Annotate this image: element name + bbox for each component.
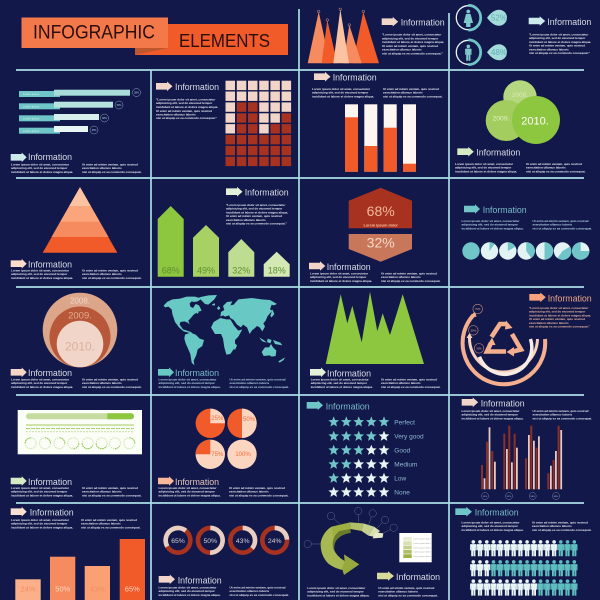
text block: incididunt ut labore et dolore magna aliqua. bbox=[307, 593, 370, 597]
arrow heading: Information bbox=[327, 368, 371, 378]
text block: Lorem ipsum dolor sit amet, consectetur bbox=[158, 586, 217, 590]
nested circles bbox=[43, 293, 117, 368]
text block: nisi ut aliquip ex ea commodo consequat. bbox=[532, 416, 592, 420]
text block: exercitation ullamco laboris bbox=[82, 166, 122, 170]
star rows: None bbox=[394, 490, 410, 497]
overlapping circles: 2009. bbox=[492, 116, 510, 122]
text block: adipisicing elit, sed do eiusmod tempor bbox=[11, 490, 68, 494]
text block: Ut enim ad minim veniam, quis nostrud bbox=[382, 44, 438, 48]
text block: Ut enim ad minim veniam, quis nostrud bbox=[82, 162, 138, 166]
panel: progress elements bbox=[11, 410, 142, 497]
title banner: ELEMENTS bbox=[179, 31, 270, 51]
text block: exercitation ullamco laboris bbox=[532, 223, 573, 227]
text block: Ut enim ad minim veniam, quis nostrud bbox=[383, 87, 439, 91]
text block: "Lorem ipsum dolor sit amet, consectetur bbox=[226, 203, 286, 207]
title banner bbox=[22, 18, 288, 55]
donut charts: 50% bbox=[203, 538, 217, 545]
house bar chart bbox=[158, 206, 290, 277]
nested circles: 2008. bbox=[70, 296, 90, 306]
arrow heading: Information bbox=[481, 398, 525, 408]
text block: nisi ut aliquip ex ea commodo consequat. bbox=[82, 276, 142, 280]
legend card: Lorem ipsum dolor bbox=[413, 542, 431, 545]
text block: Ut enim ad minim veniam, quis nostrud bbox=[81, 518, 137, 522]
arrow heading: Information bbox=[547, 17, 591, 27]
overlapping circles: 2008. bbox=[512, 92, 528, 99]
arrow heading: Information bbox=[396, 572, 440, 582]
panel: hexagon split bbox=[309, 188, 441, 283]
value markers: 50% bbox=[471, 328, 477, 332]
text block: "Lorem ipsum dolor sit amet, consectetur bbox=[156, 98, 216, 102]
star rows: Medium bbox=[394, 462, 417, 469]
text block: nisi ut aliquip ex ea commodo consequat." bbox=[226, 222, 288, 226]
text block: Lorem ipsum dolor sit amet, consectetur bbox=[310, 271, 369, 275]
column chart: 43% bbox=[90, 585, 105, 594]
text block: nisi ut aliquip ex ea commodo consequat." bbox=[382, 51, 444, 55]
hexagon chart: Lorem ipsum dolor bbox=[364, 223, 398, 227]
text block: adipisicing elit, sed do eiusmod tempor bbox=[11, 272, 68, 276]
text block: nisi ut aliquip ex ea commodo consequat. bbox=[230, 593, 289, 597]
text block: incididunt ut labore et dolore magna aliqua. bbox=[462, 226, 524, 230]
text block: Lorem ipsum dolor sit amet, consectetur bbox=[11, 162, 70, 166]
star rows: Good bbox=[394, 448, 411, 455]
star rows bbox=[328, 416, 424, 497]
star rows: Low bbox=[394, 476, 407, 483]
text block: incididunt ut labore et dolore magna aliqua. bbox=[529, 40, 591, 44]
star rows: Very good bbox=[394, 434, 424, 440]
triangle chart bbox=[308, 8, 379, 63]
panel: pyramid bbox=[11, 187, 142, 280]
arrow heading: Information bbox=[327, 262, 371, 272]
bar rows: 68% bbox=[102, 118, 107, 120]
text block: Ut enim ad minim veniam, quis nostrud bbox=[532, 409, 589, 413]
text block: adipisicing elit, sed do eiusmod tempor bbox=[158, 490, 216, 494]
text block: adipisicing elit, sed do eiusmod tempor bbox=[156, 101, 213, 105]
text block: exercitation ullamco laboris bbox=[529, 47, 569, 51]
text block: adipisicing elit, sed do eiusmod tempor bbox=[11, 522, 68, 526]
text block: nisi ut aliquip ex ea commodo consequat. bbox=[82, 493, 142, 497]
text block: adipisicing elit, sed do eiusmod tempor bbox=[226, 207, 283, 211]
text block: Ut enim ad minim veniam, quis nostrud bbox=[229, 486, 285, 490]
arrow heading: Information bbox=[483, 205, 527, 215]
text block: incididunt ut labore et dolore magna aliqua. bbox=[529, 314, 591, 318]
text block: adipisicing elit, sed do eiusmod tempor bbox=[158, 589, 216, 593]
text block: incididunt ut labore et dolore magna aliqua. bbox=[226, 210, 288, 214]
arrow heading: Information bbox=[30, 508, 74, 518]
recycle icon bbox=[487, 320, 521, 356]
text block: incididunt ut labore et dolore magna aliqua. bbox=[455, 169, 517, 173]
text block: incididunt ut labore et dolore magna aliqua. bbox=[312, 94, 374, 98]
text block: nisi ut aliquip ex ea commodo consequat. bbox=[378, 593, 438, 597]
drop 48%: 48% bbox=[491, 48, 507, 57]
text block: nisi ut aliquip ex ea commodo consequat. bbox=[81, 526, 141, 530]
text block: nisi ut aliquip ex ea commodo consequat. bbox=[383, 94, 443, 98]
white card bbox=[18, 410, 142, 454]
text block: exercitation ullamco laboris bbox=[156, 112, 196, 116]
area chart bbox=[326, 292, 424, 364]
value markers: 70% bbox=[475, 307, 481, 311]
text block: nisi ut aliquip ex ea commodo consequat. bbox=[381, 279, 441, 283]
panel: recycle arcs bbox=[463, 292, 592, 384]
text block: nisi ut aliquip ex ea commodo consequat. bbox=[230, 385, 289, 389]
column chart bbox=[15, 539, 145, 600]
text block: exercitation ullamco laboris bbox=[82, 381, 122, 385]
text block: Ut enim ad minim veniam, quis nostrud bbox=[82, 268, 138, 272]
text block: Ut enim ad minim veniam, quis nostrud bbox=[529, 317, 585, 321]
map bbox=[164, 295, 285, 365]
text block: Lorem ipsum dolor sit amet, consectetur bbox=[158, 378, 217, 382]
ring male 48% bbox=[456, 40, 481, 65]
bar rows: 52% bbox=[117, 105, 121, 107]
bar rows: 33% bbox=[92, 130, 96, 132]
panel: donuts bbox=[158, 523, 289, 597]
text block: Ut enim ad minim veniam, quis nostrud bbox=[378, 586, 434, 590]
text block: adipisicing elit, sed do eiusmod tempor bbox=[307, 590, 364, 594]
text block: Ut enim ad minim veniam, quis nostrud bbox=[381, 271, 437, 275]
text block: nisi ut aliquip ex ea commodo consequat." bbox=[529, 51, 591, 55]
text block: nisi ut aliquip ex ea commodo consequat. bbox=[381, 385, 441, 389]
arrow heading: Information bbox=[178, 575, 222, 585]
bar chart bbox=[481, 426, 562, 500]
value markers: 30% bbox=[476, 346, 482, 350]
text block: exercitation ullamco laboris bbox=[381, 381, 421, 385]
text block: Ut enim ad minim veniam, quis nostrud bbox=[82, 486, 138, 490]
panel: stacked columns bbox=[312, 72, 443, 172]
waffle chart bbox=[226, 81, 291, 166]
hexagon chart bbox=[349, 188, 412, 262]
pie charts: 100% bbox=[235, 452, 251, 458]
text block: adipisicing elit, sed do eiusmod tempor bbox=[312, 91, 369, 95]
panel: 3D arrow bbox=[304, 507, 440, 597]
arrow heading: Information bbox=[476, 148, 520, 158]
text block: incididunt ut labore et dolore magna aliqua. bbox=[462, 416, 524, 420]
text block: nisi ut aliquip ex ea commodo consequat. bbox=[526, 169, 586, 173]
text block: Ut enim ad minim veniam, quis nostrud bbox=[532, 219, 589, 223]
text block: incididunt ut labore et dolore magna aliqua. bbox=[311, 385, 373, 389]
text block: adipisicing elit, sed do eiusmod tempor bbox=[11, 381, 68, 385]
legend card bbox=[399, 533, 432, 562]
text block: Lorem ipsum dolor sit amet, consectetur bbox=[311, 378, 370, 382]
panel: star ratings bbox=[307, 400, 424, 497]
drop 52%: 52% bbox=[491, 14, 507, 22]
text block: Ut enim ad minim veniam, quis nostrud bbox=[529, 44, 585, 48]
text block: adipisicing elit, sed do eiusmod tempor bbox=[462, 413, 519, 417]
panel: square grid bbox=[156, 81, 291, 166]
text block: adipisicing elit, sed do eiusmod tempor bbox=[455, 166, 512, 170]
overlapping circles bbox=[486, 80, 560, 144]
house bar chart: 68% bbox=[162, 266, 180, 276]
text block: Lorem ipsum dolor sit amet, consectetur bbox=[462, 409, 520, 413]
text block: exercitation ullamco laboris bbox=[230, 381, 270, 385]
text block: incididunt ut labore et dolore magna aliqua. bbox=[156, 105, 218, 109]
bar rows: Lorem ipsum bbox=[23, 129, 40, 133]
text block: adipisicing elit, sed do eiusmod tempor bbox=[311, 381, 368, 385]
arrow heading: Information bbox=[175, 82, 219, 92]
arrow heading: Information bbox=[475, 508, 519, 518]
donut charts: 65% bbox=[171, 538, 185, 545]
text block: incididunt ut labore et dolore magna aliqua. bbox=[462, 528, 524, 532]
text block: "Lorem ipsum dolor sit amet, consectetur bbox=[382, 33, 442, 37]
arrow heading: Information bbox=[28, 368, 72, 378]
nested circles: 2010. bbox=[65, 340, 95, 354]
arrow heading: Information bbox=[548, 293, 592, 303]
pie charts: 50% bbox=[243, 417, 256, 423]
text block: Ut enim ad minim veniam, quis nostrud bbox=[381, 378, 437, 382]
arrow heading: Information bbox=[175, 477, 219, 487]
text block: Lorem ipsum dolor sit amet, consectetur bbox=[312, 87, 371, 91]
panel: quarter pies bbox=[158, 409, 289, 497]
bar rows: 38% bbox=[134, 92, 139, 94]
text block: Ut enim ad minim veniam, quis nostrud bbox=[226, 214, 282, 218]
text block: Lorem ipsum dolor sit amet, consectetur bbox=[462, 219, 520, 223]
text block: exercitation ullamco laboris bbox=[382, 48, 422, 52]
panel: nested years bbox=[11, 293, 142, 389]
panel: gender percentages bbox=[456, 5, 591, 65]
text block: nisi ut aliquip ex ea commodo consequat. bbox=[229, 493, 289, 497]
text block: adipisicing elit, sed do eiusmod tempor bbox=[462, 223, 519, 227]
text block: incididunt ut labore et dolore magna aliqua. bbox=[382, 40, 444, 44]
bar rows bbox=[19, 88, 140, 134]
column chart: 24% bbox=[20, 585, 36, 594]
text block: adipisicing elit, sed do eiusmod tempor bbox=[11, 166, 68, 170]
bar rows: Lorem ipsum bbox=[23, 104, 40, 108]
text block: adipisicing elit, sed do eiusmod tempor bbox=[158, 381, 216, 385]
hexagon chart: 32% bbox=[367, 235, 395, 251]
bar rows: Lorem ipsum bbox=[23, 116, 40, 120]
text block: exercitation ullamco laboris bbox=[82, 490, 122, 494]
bar chart: 51% bbox=[507, 496, 511, 498]
column chart: 50% bbox=[55, 585, 71, 594]
text block: exercitation ullamco laboris bbox=[82, 272, 122, 276]
overlapping circles: 2010. bbox=[521, 116, 549, 128]
bar chart: 58% bbox=[531, 496, 535, 498]
text block: nisi ut aliquip ex ea commodo consequat." bbox=[529, 325, 591, 329]
title banner: INFOGRAPHIC bbox=[33, 22, 155, 44]
3D curved arrow bbox=[304, 507, 397, 575]
value markers bbox=[468, 304, 484, 353]
text block: adipisicing elit, sed do eiusmod tempor bbox=[462, 524, 519, 528]
text block: Lorem ipsum dolor sit amet, consectetur bbox=[11, 268, 70, 272]
text block: exercitation ullamco laboris bbox=[529, 321, 569, 325]
panel: pie row bbox=[462, 204, 592, 260]
text block: adipisicing elit, sed do eiusmod tempor bbox=[529, 310, 586, 314]
arrow heading: Information bbox=[175, 368, 219, 378]
legend card: Lorem ipsum dolor bbox=[413, 538, 431, 541]
text block: Ut enim ad minim veniam, quis nostrud bbox=[526, 162, 582, 166]
text block: adipisicing elit, sed do eiusmod tempor bbox=[310, 275, 367, 279]
arrow heading: Information bbox=[28, 477, 72, 487]
bar rows: Lorem ipsum bbox=[23, 92, 40, 96]
text block: exercitation ullamco laboris bbox=[226, 218, 266, 222]
arrow heading: Information bbox=[326, 402, 370, 412]
pyramid chart bbox=[43, 187, 117, 253]
text block: nisi ut aliquip ex ea commodo consequat. bbox=[532, 528, 592, 532]
donut charts bbox=[161, 523, 287, 557]
text block: Lorem ipsum dolor sit amet, consectetur bbox=[455, 162, 514, 166]
text block: "Lorem ipsum dolor sit amet, consectetur bbox=[529, 32, 589, 36]
donut charts: 24% bbox=[268, 538, 282, 545]
panel: arrow bars bbox=[158, 187, 290, 277]
text block: exercitation ullamco laboris bbox=[229, 490, 269, 494]
text block: exercitation ullamco laboris bbox=[81, 522, 121, 526]
text block: adipisicing elit, sed do eiusmod tempor bbox=[382, 36, 439, 40]
text block: incididunt ut labore et dolore magna aliqua. bbox=[11, 493, 73, 497]
nested circles: 2009. bbox=[68, 310, 92, 322]
concentric arcs bbox=[463, 311, 545, 384]
text block: incididunt ut labore et dolore magna aliqua. bbox=[158, 593, 221, 597]
text block: nisi ut aliquip ex ea commodo consequat." bbox=[156, 116, 218, 120]
arrow heading: Information bbox=[245, 188, 289, 198]
arrow heading: Information bbox=[401, 18, 445, 28]
arrow heading: Information bbox=[333, 72, 377, 82]
bar chart: 58% bbox=[554, 496, 558, 498]
text block: Lorem ipsum dolor sit amet, consectetur bbox=[307, 586, 366, 590]
column chart bbox=[345, 104, 416, 172]
text block: incididunt ut labore et dolore magna aliqua. bbox=[158, 385, 221, 389]
bar chart: 15% bbox=[483, 496, 487, 498]
text block: incididunt ut labore et dolore magna aliqua. bbox=[158, 493, 221, 497]
ring female 52% bbox=[456, 5, 481, 30]
arrow heading: Information bbox=[28, 260, 72, 270]
pie charts bbox=[196, 409, 257, 469]
panel: venn years bbox=[455, 80, 586, 173]
panel: orange columns bbox=[11, 507, 145, 600]
text block: exercitation ullamco laboris bbox=[230, 589, 270, 593]
pie charts: 25% bbox=[211, 416, 224, 422]
panel: mountain triangles bbox=[308, 8, 445, 63]
house bar chart: 32% bbox=[232, 266, 250, 276]
panel: grouped bars bbox=[462, 398, 592, 500]
text block: Ut enim ad minim veniam, quis nostrud bbox=[82, 378, 138, 382]
text block: nisi ut aliquip ex ea commodo consequat. bbox=[82, 170, 142, 174]
text block: Ut enim ad minim veniam, quis nostrud bbox=[532, 520, 588, 524]
text block: exercitation ullamco laboris bbox=[383, 91, 423, 95]
arrow heading: Information bbox=[28, 152, 72, 162]
text block: Lorem ipsum dolor sit amet, consectetur bbox=[11, 518, 70, 522]
panel: people chart bbox=[455, 507, 592, 596]
text block: incididunt ut labore et dolore magna aliqua. bbox=[11, 170, 73, 174]
pie charts: 75% bbox=[211, 452, 224, 458]
text block: exercitation ullamco laboris bbox=[532, 413, 573, 417]
pictogram rows bbox=[470, 540, 578, 596]
star rows: Perfect bbox=[394, 419, 415, 426]
text block: incididunt ut labore et dolore magna aliqua. bbox=[310, 279, 372, 283]
text block: exercitation ullamco laboris bbox=[381, 275, 421, 279]
house bar chart: 18% bbox=[268, 266, 286, 276]
text block: exercitation ullamco laboris bbox=[532, 524, 572, 528]
panel: green peaks bbox=[310, 292, 441, 389]
panel: world map bbox=[158, 295, 289, 389]
text block: incididunt ut labore et dolore magna aliqua. bbox=[11, 526, 73, 530]
text block: exercitation ullamco laboris bbox=[378, 590, 418, 594]
column chart: 65% bbox=[125, 585, 140, 594]
text block: incididunt ut labore et dolore magna aliqua. bbox=[11, 276, 73, 280]
legend card: Lorem ipsum dolor bbox=[413, 555, 431, 558]
text block: adipisicing elit, sed do eiusmod tempor bbox=[529, 36, 586, 40]
hexagon chart: 68% bbox=[367, 203, 395, 219]
text block: Ut enim ad minim veniam, quis nostrud bbox=[230, 378, 286, 382]
text block: Ut enim ad minim veniam, quis nostrud bbox=[230, 586, 286, 590]
text block: Lorem ipsum dolor sit amet, consectetur bbox=[11, 486, 70, 490]
text block: nisi ut aliquip ex ea commodo consequat. bbox=[532, 226, 592, 230]
text block: Ut enim ad minim veniam, quis nostrud bbox=[156, 109, 212, 113]
legend card: Lorem ipsum dolor bbox=[413, 546, 431, 549]
text block: nisi ut aliquip ex ea commodo consequat. bbox=[82, 385, 142, 389]
text block: "Lorem ipsum dolor sit amet, consectetur bbox=[529, 306, 589, 310]
text block: incididunt ut labore et dolore magna aliqua. bbox=[11, 385, 73, 389]
text block: Lorem ipsum dolor sit amet, consectetur bbox=[11, 378, 70, 382]
text block: Lorem ipsum dolor sit amet, consectetur bbox=[158, 486, 217, 490]
house bar chart: 49% bbox=[197, 266, 215, 276]
text block: Lorem ipsum dolor sit amet, consectetur bbox=[462, 520, 520, 524]
pie charts bbox=[462, 242, 589, 260]
donut charts: 43% bbox=[236, 538, 250, 545]
panel: horizontal bars bbox=[11, 88, 142, 174]
text block: exercitation ullamco laboris bbox=[526, 166, 566, 170]
legend card: Lorem ipsum dolor bbox=[413, 551, 431, 554]
